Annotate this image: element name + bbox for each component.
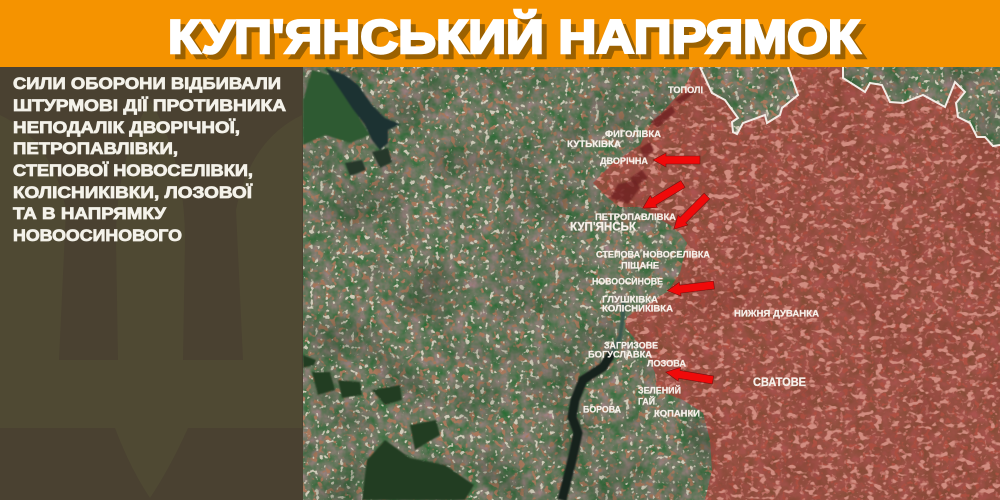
body text: ШТУРМОВІ ДІЇ ПРОТИВНИКА	[13, 96, 286, 115]
title: КУП'ЯНСЬКИЙ НАПРЯМОК	[168, 10, 860, 63]
body text	[13, 74, 286, 245]
label: ГАЙ	[638, 396, 655, 408]
arrow: Petropavlivka	[669, 191, 712, 234]
label: БОРОВА	[583, 404, 621, 416]
label: ПЕТРОПАВЛІВКА	[595, 212, 676, 223]
frontier line	[700, 67, 1000, 146]
arrows	[639, 153, 715, 387]
body text: НОВООСИНОВОГО	[13, 226, 182, 245]
label: КУП'ЯНСЬК	[570, 222, 637, 234]
header band	[0, 0, 1000, 67]
forest and reservoir top left	[303, 68, 400, 176]
dark patches near Dvorichna	[610, 90, 694, 204]
label: СТЕПОВА НОВОСЕЛІВКА	[596, 250, 710, 260]
body text: ПЕТРОПАВЛІВКИ,	[13, 139, 178, 158]
arrow: Lozova	[665, 365, 714, 387]
map labels	[567, 85, 819, 420]
label: НИЖНЯ ДУВАНКА	[734, 308, 819, 320]
label: ПІЩАНЕ	[621, 260, 659, 272]
body text: КОЛІСНИКІВКИ, ЛОЗОВОЇ	[13, 183, 253, 202]
label: ДВОРІЧНА	[600, 156, 648, 167]
label: СВАТОВЕ	[753, 377, 806, 389]
river	[562, 300, 623, 500]
label: ГЛУШКІВКА	[602, 294, 658, 306]
label: ФИГОЛІВКА	[605, 129, 661, 140]
label: ТОПОЛІ	[668, 85, 703, 96]
occupied territory	[580, 60, 1000, 500]
body text: НЕПОДАЛІК ДВОРІЧНОЇ,	[13, 118, 240, 137]
satellite terrain	[303, 60, 1000, 500]
icon: trident watermark	[0, 100, 302, 498]
arrow: Novoosynove	[666, 278, 715, 298]
body text: ТА В НАПРЯМКУ	[13, 204, 166, 223]
left text panel background	[0, 60, 303, 500]
label: ЗАГРИЗОВЕ	[604, 340, 658, 352]
label: ЛОЗОВА	[647, 358, 686, 370]
label: КУТЬКІВКА	[567, 139, 621, 150]
label: ЗЕЛЕНИЙ	[638, 384, 681, 396]
title: КУП'ЯНСЬКИЙ НАПРЯМОК	[173, 15, 865, 68]
map	[303, 60, 1000, 500]
label: КОЛІСНИКІВКА	[602, 304, 673, 314]
arrow: Dvorichna	[653, 153, 700, 167]
body text: СТЕПОВОЇ НОВОСЕЛІВКИ,	[13, 161, 253, 180]
label: НОВООСИНОВЕ	[592, 276, 663, 288]
label: БОГУСЛАВКА	[588, 350, 652, 360]
forests bottom left	[303, 355, 474, 500]
label: КОПАНКИ	[654, 408, 700, 420]
body text: СИЛИ ОБОРОНИ ВІДБИВАЛИ	[13, 74, 281, 93]
arrow: north of Petropavlivka	[639, 178, 687, 214]
